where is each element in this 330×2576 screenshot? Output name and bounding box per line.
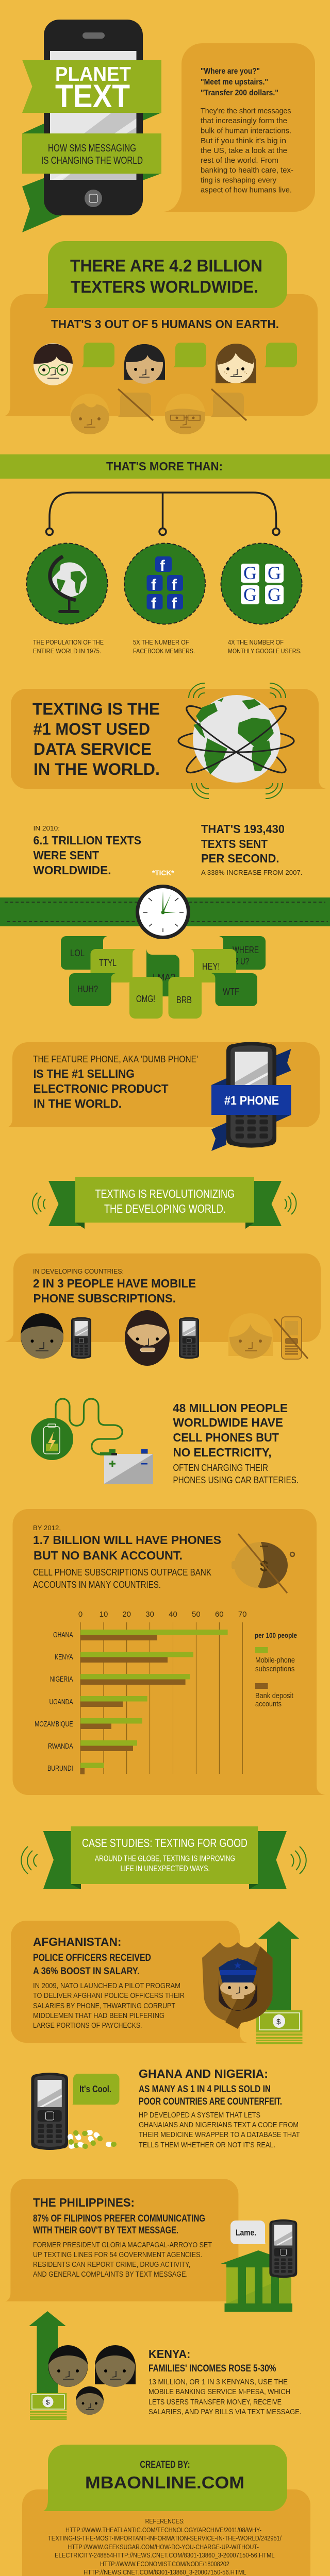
bubble: OMG!: OMG! [136, 994, 155, 1004]
heading bubble: created by: CREATED BY: [140, 2460, 190, 2470]
caption: google: 4X THE NUMBER OF [228, 638, 284, 646]
legend [255, 1631, 297, 1708]
panel text: FORMER PRESIDENT GLORIA MACAPAGAL-ARROYO SET [33, 2241, 212, 2249]
icon circle: globe [27, 543, 107, 624]
panel text: AND GENERAL COMPLAINTS BY TEXT MESSAGE. [33, 2270, 188, 2279]
icon circle: google: G [268, 584, 281, 605]
icon: signal arcs [32, 1193, 296, 1214]
text: kenya: MOBILE BANKING SERVICE M-PESA, WHICH [148, 2387, 290, 2396]
heading bubble: created by: MBAONLINE.COM [85, 2473, 244, 2492]
axis labels: 20 [122, 1610, 131, 1619]
header: phone with title banners [22, 20, 161, 232]
panel text [33, 1267, 196, 1305]
icon: man [48, 2345, 88, 2387]
bubble: WTF [211, 973, 257, 1006]
panel text: AFGHANISTAN: [33, 1935, 122, 1948]
panel text: IS THE #1 SELLING [33, 1067, 135, 1080]
reference list: REFERENCES: [145, 2517, 185, 2525]
country labels: MOZAMBIQUE [35, 1720, 73, 1728]
panel text [33, 1935, 185, 2030]
title banner: PLANET [55, 63, 131, 86]
country labels: NIGERIA [50, 1675, 73, 1684]
intro paragraph: But if you think it's big in [201, 137, 286, 145]
legend: Mobile-phone [255, 1656, 295, 1665]
icon: face with dark hair [124, 344, 165, 384]
panel text: PHONE SUBSCRIPTIONS. [33, 1292, 176, 1305]
panel: philippines [5, 2179, 238, 2301]
banner: texting is revolutionizing: TEXTING IS REVOLUTIONIZING [95, 1187, 235, 1200]
intro paragraph: bulk of human interactions. [201, 127, 291, 135]
icon: face with glasses [34, 343, 73, 385]
reference list: HTTP://NEWS.CNET.COM/8301-13860_3-20007150-56.HTML [84, 2568, 246, 2576]
panel text: THE PHILIPPINES: [33, 2196, 135, 2209]
icon: phone with counterfeit pills [31, 2073, 120, 2150]
panel text: ACCOUNTS IN MANY COUNTRIES. [33, 1580, 161, 1590]
country labels: UGANDA [50, 1698, 73, 1706]
panel text: CELL PHONE SUBSCRIPTIONS OUTPACE BANK [33, 1567, 211, 1578]
bubble: WHERE R U?: WHERE [233, 945, 259, 955]
panel: afghanistan [11, 1921, 248, 2043]
country labels: KENYA [55, 1653, 73, 1662]
intro paragraph: rest of the world. From [201, 156, 278, 165]
intro quotes: "Where are you?" [201, 67, 260, 76]
bubble: WHERE R U?: R U? [234, 956, 249, 967]
stat: 48 million people [173, 1401, 299, 1485]
text: ghana and nigeria: AS MANY AS 1 IN 4 PILLS SOLD IN [139, 2083, 271, 2095]
panel text: BY 2012, [33, 1524, 61, 1532]
panel text: POLICE OFFICERS RECEIVED [33, 1952, 151, 1963]
intro paragraph: that increasingly form the [201, 116, 287, 125]
icon: child [76, 2386, 104, 2415]
stat: 6.1 trillion texts [33, 824, 141, 877]
panel text: IN THE WORLD. [34, 1097, 122, 1110]
icon: woman [95, 2345, 136, 2387]
icon: phone [71, 1317, 91, 1359]
heading: DATA SERVICE [34, 740, 152, 758]
country labels: GHANA [53, 1631, 73, 1639]
icon: signal arcs around globe [189, 683, 286, 799]
bubble: LMA?: LMA? [153, 972, 175, 982]
icon: bearded face [125, 1310, 170, 1366]
panel text: IN DEVELOPING COUNTRIES: [33, 1267, 124, 1275]
reference list: HTTP://WWW.ECONOMIST.COM/NODE/18008202 [100, 2560, 229, 2568]
axis labels: 40 [169, 1610, 177, 1619]
icon: faded face [228, 1313, 273, 1359]
icon: government building with phone [221, 2219, 297, 2312]
bubble: WTF: WTF [223, 987, 239, 997]
legend: Bank deposit [255, 1691, 294, 1700]
text: ghana and nigeria: POOR COUNTRIES ARE COUNTERFEIT. [139, 2096, 282, 2107]
panel text: IN 2009, NATO LAUNCHED A PILOT PROGRAM [33, 1981, 180, 1990]
icon: rising arrow with money: $ [276, 2018, 281, 2026]
banner: case studies: LIFE IN UNEXPECTED WAYS. [121, 1865, 210, 1873]
label: tick: *TICK* [152, 869, 174, 877]
stat: 48 million people: OFTEN CHARGING THEIR [173, 1463, 268, 1473]
intro quotes: "Transfer 200 dollars." [201, 89, 278, 97]
bubble: TTYL [90, 949, 136, 982]
icon: rising arrow with money [256, 1921, 302, 2044]
icon circle: google: G [243, 563, 257, 583]
icon circle: facebook: f [151, 577, 157, 594]
caption: google: MONTHLY GOOGLE USERS. [228, 647, 301, 655]
axis labels [78, 1610, 247, 1619]
heading bubble: 4.2 billion texters: THERE ARE 4.2 BILLION [70, 256, 262, 275]
icon circle: google [221, 543, 302, 624]
panel text: MIDDLEMEN THAT HAD BEEN PILFERING [33, 2011, 164, 2020]
panel text: THE FEATURE PHONE, AKA 'DUMB PHONE' [33, 1054, 198, 1064]
icon circle: facebook: f [160, 557, 166, 574]
title banner: TEXT [55, 78, 130, 114]
intro paragraph: the US, take a look at the [201, 146, 287, 155]
text: kenya: LETS USERS TRANSFER MONEY, RECEIVE [148, 2398, 282, 2406]
text: ghana and nigeria: GHANA AND NIGERIA: [139, 2067, 268, 2080]
bank account bars [80, 1635, 186, 1774]
icon: #1 phone ribbon: #1 PHONE [224, 1094, 279, 1108]
stat: 48 million people: PHONES USING CAR BATTERIES. [173, 1475, 299, 1485]
icon: faded face [70, 394, 109, 434]
intro paragraph: banking to health care, tex- [201, 166, 293, 175]
reference list: TEXTING-IS-THE-MOST-IMPORTANT-INFORMATION-SERVICE-IN-THE-WORLD/242951/ [48, 2534, 282, 2542]
caption: facebook: 5X THE NUMBER OF [133, 638, 189, 646]
bubble: It's Cool: It's Cool. [79, 2084, 111, 2094]
icon: faded crossed-out phone [274, 1317, 308, 1359]
bubble: Lame [230, 2221, 266, 2244]
icon: green text bubble [81, 343, 114, 367]
bubble: HUH? [69, 973, 116, 1006]
panel text: 87% OF FILIPINOS PREFER COMMUNICATING [33, 2213, 205, 2224]
icon circle: facebook [124, 543, 205, 624]
panel text: ELECTRONIC PRODUCT [33, 1082, 169, 1095]
stat: 48 million people: NO ELECTRICITY, [173, 1446, 271, 1459]
icon: green text bubble [173, 343, 206, 367]
icon: phone [179, 1317, 199, 1359]
icon: globe with orbits [178, 695, 294, 783]
panel text: RESIDENTS CAN REPORT CRIME, DRUG ACTIVITY, [33, 2260, 190, 2269]
icon circle: facebook: f [172, 577, 177, 594]
panel text: 1.7 BILLION WILL HAVE PHONES [33, 1533, 221, 1547]
icon: face with brown hair [216, 344, 256, 383]
axis labels: 30 [145, 1610, 154, 1619]
text: kenya [148, 2347, 301, 2416]
intro paragraph: aspect of how humans live. [201, 185, 292, 195]
country labels: RWANDA [48, 1742, 73, 1751]
title banner [22, 60, 161, 114]
panel: #1 data service [11, 683, 326, 799]
panel: intro speech bubble [164, 43, 315, 212]
caption: population: ENTIRE WORLD IN 1975. [33, 647, 101, 655]
reference list: HTTP://WWW.GEEKSUGAR.COM/HOW-DO-YOU-CHARGE-UP-WITHOUT- [68, 2543, 259, 2551]
stat: 6.1 trillion texts: IN 2010: [33, 824, 60, 832]
bubble: LOL: LOL [70, 948, 85, 958]
stat: 48 million people: WORLDWIDE HAVE [173, 1416, 283, 1429]
stat: 48 million people: CELL PHONES BUT [173, 1431, 279, 1444]
subtitle banner [22, 133, 161, 174]
panel text: SALARIES BY PHONE, THWARTING CORRUPT [33, 2002, 175, 2010]
panel: feature phone [7, 1042, 320, 1151]
axis labels: 10 [100, 1610, 108, 1619]
stat: 193,430 texts per second: A 338% INCREASE FROM 2007. [201, 869, 302, 876]
reference list: ELECTRICITY-248854HTTP://NEWS.CNET.COM/8301-13860_3-20007150-56.HTML [55, 2551, 275, 2559]
text: ghana and nigeria [139, 2067, 300, 2149]
subtitle banner: IS CHANGING THE WORLD [41, 155, 143, 166]
heading band: that's more than [0, 454, 330, 479]
bubble: OMG! [129, 977, 163, 1019]
stat: 193,430 texts per second: THAT'S 193,430 [201, 822, 285, 836]
panel text [33, 2196, 212, 2279]
text-speak bubbles [61, 936, 266, 1019]
legend: accounts [255, 1700, 282, 1708]
icon circle: facebook: f [151, 595, 157, 612]
heading bubble: 4.2 billion texters: TEXTERS WORLDWIDE. [71, 277, 258, 296]
icon: faded crossed-out bubble [210, 389, 246, 420]
icon: #1 phone ribbon [211, 1042, 291, 1151]
caption: facebook [133, 638, 195, 655]
country labels: BURUNDI [47, 1764, 73, 1773]
text: kenya: 13 MILLION, OR 1 IN 3 KENYANS, USE THE [148, 2378, 288, 2386]
text: kenya: FAMILIES' INCOMES ROSE 5-30% [148, 2363, 276, 2374]
icon: faded crossed-out piggy bank: $ [260, 1558, 269, 1575]
mobile subscription bars [80, 1630, 228, 1768]
banner: case studies: AROUND THE GLOBE, TEXTING IS IMPROVING [95, 1855, 235, 1863]
caption: facebook: FACEBOOK MEMBERS. [133, 647, 195, 655]
panel text: TO DELIVER AFGHANI POLICE OFFICERS THEIR [33, 1991, 185, 2000]
bubble: It's Cool [72, 2074, 120, 2105]
legend: per 100 people [255, 1631, 297, 1639]
caption: google [228, 638, 301, 655]
banner: texting is revolutionizing [32, 1177, 296, 1229]
panel text [33, 1054, 198, 1110]
subheading: THAT'S 3 OUT OF 5 HUMANS ON EARTH. [51, 317, 279, 331]
icon circle: facebook: f [172, 595, 177, 612]
connector bracket [46, 493, 279, 535]
panel text: WITH THEIR GOV'T BY TEXT MESSAGE. [33, 2225, 178, 2236]
intro quotes: "Meet me upstairs." [201, 78, 268, 87]
text: ghana and nigeria: GHANAIANS AND NIGERIANS TEXT A CODE FROM [139, 2121, 299, 2129]
panel: references [22, 2489, 317, 2576]
icon circle: google: G [268, 563, 281, 583]
panel: 3 out of 5 humans [5, 294, 318, 434]
subtitle banner: HOW SMS MESSAGING [48, 143, 136, 154]
caption: population [33, 638, 104, 655]
heading: TEXTING IS THE [32, 700, 160, 718]
reference list [48, 2517, 282, 2576]
axis labels: 70 [238, 1610, 247, 1619]
clock band [0, 885, 330, 939]
banner: texting is revolutionizing: THE DEVELOPING WORLD. [104, 1202, 226, 1215]
stat: 6.1 trillion texts: WERE SENT [33, 849, 100, 862]
bubble: BRB: BRB [176, 995, 192, 1005]
bubble: BRB [168, 977, 202, 1019]
intro quotes [201, 67, 278, 97]
icon: phone battery charging from car battery [31, 1399, 153, 1484]
stat: 193,430 texts per second [201, 822, 302, 876]
icon: clock [136, 885, 190, 939]
bubble: WHERE R U? [219, 936, 266, 970]
icon: kenya rising income [29, 2311, 136, 2420]
panel text: A 36% BOOST IN SALARY. [33, 1965, 140, 1977]
text: kenya: SALARIES, AND PAY BILLS VIA TEXT MESSAGE. [148, 2408, 301, 2416]
banner: case studies: CASE STUDIES: TEXTING FOR GOOD [82, 1836, 248, 1850]
caption: population: THE POPULATION OF THE [33, 638, 104, 646]
banner: case studies [21, 1826, 306, 1889]
text: ghana and nigeria: THEIR MEDICINE WRAPPER TO A DATABASE THAT [139, 2130, 300, 2139]
bar chart [35, 1610, 247, 1774]
bubble: HEY! [190, 949, 236, 982]
heading bubble: created by [43, 2445, 287, 2511]
panel: bank accounts chart [12, 1509, 325, 1795]
stat: 6.1 trillion texts: WORLDWIDE. [33, 863, 111, 877]
intro paragraph [201, 107, 293, 195]
stat: 48 million people: 48 MILLION PEOPLE [173, 1401, 288, 1415]
panel text: 2 IN 3 PEOPLE HAVE MOBILE [33, 1277, 196, 1290]
bubble: LMA? [146, 949, 179, 996]
icon circle: google: G [243, 584, 257, 605]
panel text: UP TEXTING LINES FOR 54 GOVERNMENT AGENCIES. [33, 2250, 202, 2259]
bubble: HUH?: HUH? [77, 984, 98, 994]
reference list: HTTP://WWW.THEATLANTIC.COM/TECHNOLOGY/ARCHIVE/2011/08/WHY- [65, 2526, 261, 2534]
intro paragraph: ting is reshaping every [201, 176, 276, 184]
heading [32, 700, 160, 778]
text: ghana and nigeria: TELLS THEM WHETHER OR NOT IT'S REAL. [139, 2141, 275, 2149]
icon: face [21, 1313, 63, 1359]
text: kenya: KENYA: [148, 2347, 190, 2361]
intro paragraph: They're the short messages [201, 107, 291, 115]
icon: kenya rising income: $ [46, 2398, 50, 2406]
bubble: TTYL: TTYL [99, 958, 117, 968]
bubble: HEY!: HEY! [202, 961, 220, 972]
icon: smartphone [44, 20, 143, 215]
icon: pills [67, 2129, 117, 2149]
icon: signal arcs [21, 1846, 306, 1874]
icon: faded crossed-out bubble [118, 389, 153, 420]
icon: green text bubble [263, 343, 297, 367]
panel text [33, 1524, 221, 1590]
heading: #1 MOST USED [33, 720, 150, 738]
bubble: LOL [61, 936, 107, 970]
axis labels: 0 [78, 1610, 82, 1619]
stat: 6.1 trillion texts: 6.1 TRILLION TEXTS [33, 834, 141, 847]
axis labels: 60 [215, 1610, 224, 1619]
icon: police officer badge [202, 1942, 273, 2029]
heading bubble: 4.2 billion texters [43, 241, 287, 308]
country labels [35, 1631, 73, 1773]
heading: IN THE WORLD. [34, 760, 160, 778]
panel: developing countries [4, 1253, 321, 1366]
axis labels: 50 [192, 1610, 201, 1619]
icon: faded crossed-out piggy bank [232, 1534, 294, 1593]
stat: 193,430 texts per second: TEXTS SENT [201, 837, 268, 851]
panel text: LARGE PORTIONS OF PAYCHECKS. [33, 2021, 142, 2030]
icon: faded face with glasses [165, 394, 205, 434]
stat: 193,430 texts per second: PER SECOND. [201, 852, 279, 865]
bubble: Lame: Lame. [236, 2228, 256, 2238]
panel text: BUT NO BANK ACCOUNT. [34, 1549, 183, 1562]
heading band: that's more than: THAT'S MORE THAN: [106, 460, 223, 473]
legend: subscriptions [255, 1665, 294, 1673]
text: ghana and nigeria: HP DEVELOPED A SYSTEM THAT LETS [139, 2111, 260, 2120]
